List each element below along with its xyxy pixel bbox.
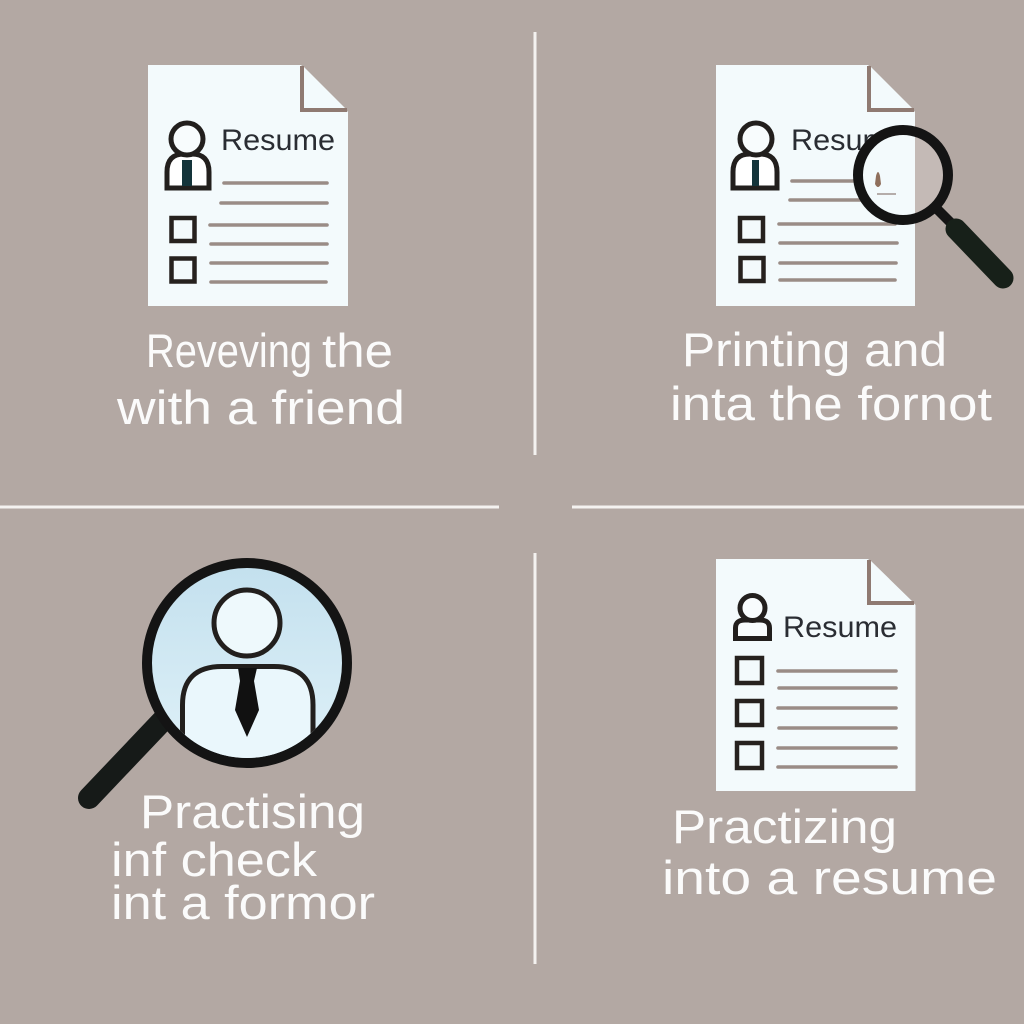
caption 1: Reveving xyxy=(146,324,312,377)
caption 4: Practizing xyxy=(672,800,897,853)
panel: printing xyxy=(670,65,1003,430)
icon: resume document 1: Resume xyxy=(221,124,335,157)
caption 1 xyxy=(116,324,405,434)
icon: magnifier xyxy=(858,130,1003,278)
icon: magnifier with person xyxy=(89,563,347,798)
caption 2 xyxy=(670,323,992,430)
caption 3: int a formor xyxy=(111,876,375,929)
panel: practizing xyxy=(662,559,997,904)
caption 1: the xyxy=(322,324,393,377)
icon: resume document 2 xyxy=(716,65,915,306)
panel: practising xyxy=(89,563,375,929)
caption 2: inta the fornot xyxy=(670,377,992,430)
icon: resume document 1 xyxy=(148,65,348,306)
caption 3: Practising xyxy=(140,785,365,838)
caption 4 xyxy=(662,800,997,904)
caption 2: Printing and xyxy=(682,323,947,376)
caption 4: into a resume xyxy=(662,851,997,904)
caption 3: inf check xyxy=(111,833,318,886)
caption 1: with a friend xyxy=(116,381,405,434)
caption 3 xyxy=(111,785,375,929)
icon: resume document 3: Resume xyxy=(783,611,897,644)
icon: resume document 3 xyxy=(716,559,916,791)
panel: reviewing with a friend xyxy=(116,65,405,434)
icon: resume document 2: Resume xyxy=(791,124,905,157)
